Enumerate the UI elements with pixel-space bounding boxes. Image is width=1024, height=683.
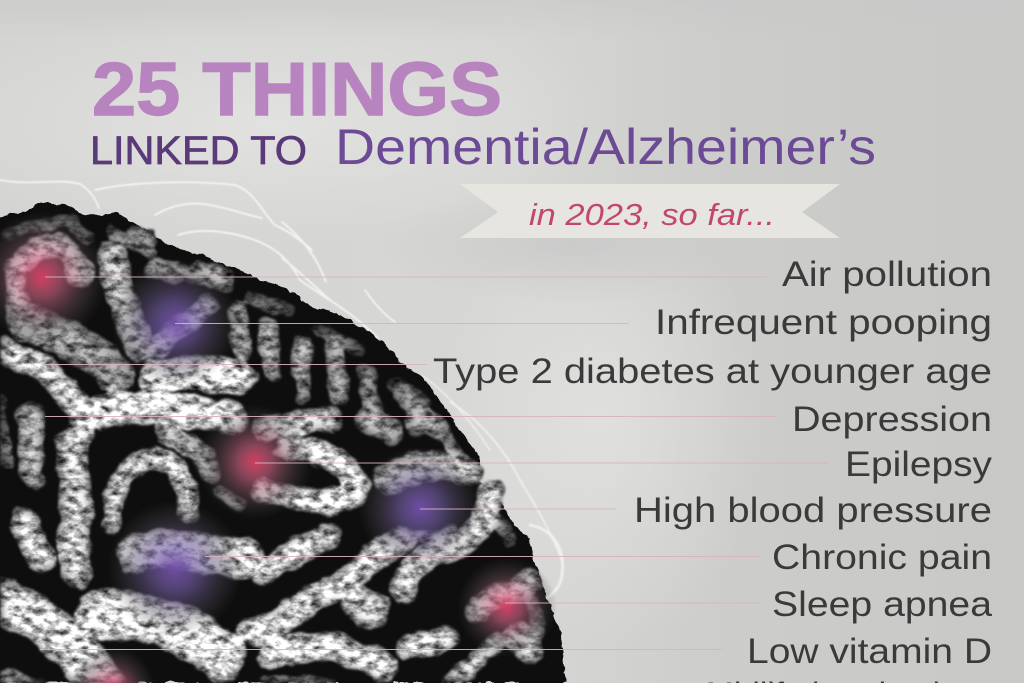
brain silhouette xyxy=(0,203,566,683)
item: Sleep apnea: Sleep apnea xyxy=(772,585,993,624)
brain illustration xyxy=(0,203,566,683)
list of linked factors xyxy=(433,255,993,683)
glow: red, air pollution xyxy=(0,211,108,343)
brain folds xyxy=(0,222,540,683)
banner xyxy=(460,184,840,238)
white lightning strands xyxy=(0,180,563,600)
glow: violet, high blood pressure xyxy=(358,446,482,570)
item: Depression: Depression xyxy=(792,400,992,439)
subtitle: LINKED TO: LINKED TO xyxy=(90,129,307,173)
item: Low vitamin D: Low vitamin D xyxy=(747,632,992,671)
glow: violet, infrequent pooping xyxy=(111,259,239,387)
glow: red, epilepsy xyxy=(197,404,313,520)
item: Type 2 diabetes at younger age: Type 2 diabetes at younger age xyxy=(433,352,992,391)
item: Epilepsy: Epilepsy xyxy=(845,445,993,484)
subtitle: Dementia/Alzheimer's: Dementia/Alzheimer’s xyxy=(335,119,876,175)
dim rim folds xyxy=(8,222,540,630)
item: High blood pressure: High blood pressure xyxy=(634,491,992,530)
item: Infrequent pooping: Infrequent pooping xyxy=(655,303,992,342)
title: 25 THINGS: 25 THINGS xyxy=(92,47,502,131)
glow: red, bottom xyxy=(68,646,156,683)
item: Chronic pain: Chronic pain xyxy=(772,538,992,577)
leader lines xyxy=(40,277,828,650)
banner ribbon xyxy=(460,184,840,238)
banner text: in 2023, so far... xyxy=(529,197,775,232)
glow: violet, chronic pain xyxy=(107,500,243,636)
glow: red, sleep apnea xyxy=(457,557,557,657)
item: Air pollution: Air pollution xyxy=(782,255,992,294)
